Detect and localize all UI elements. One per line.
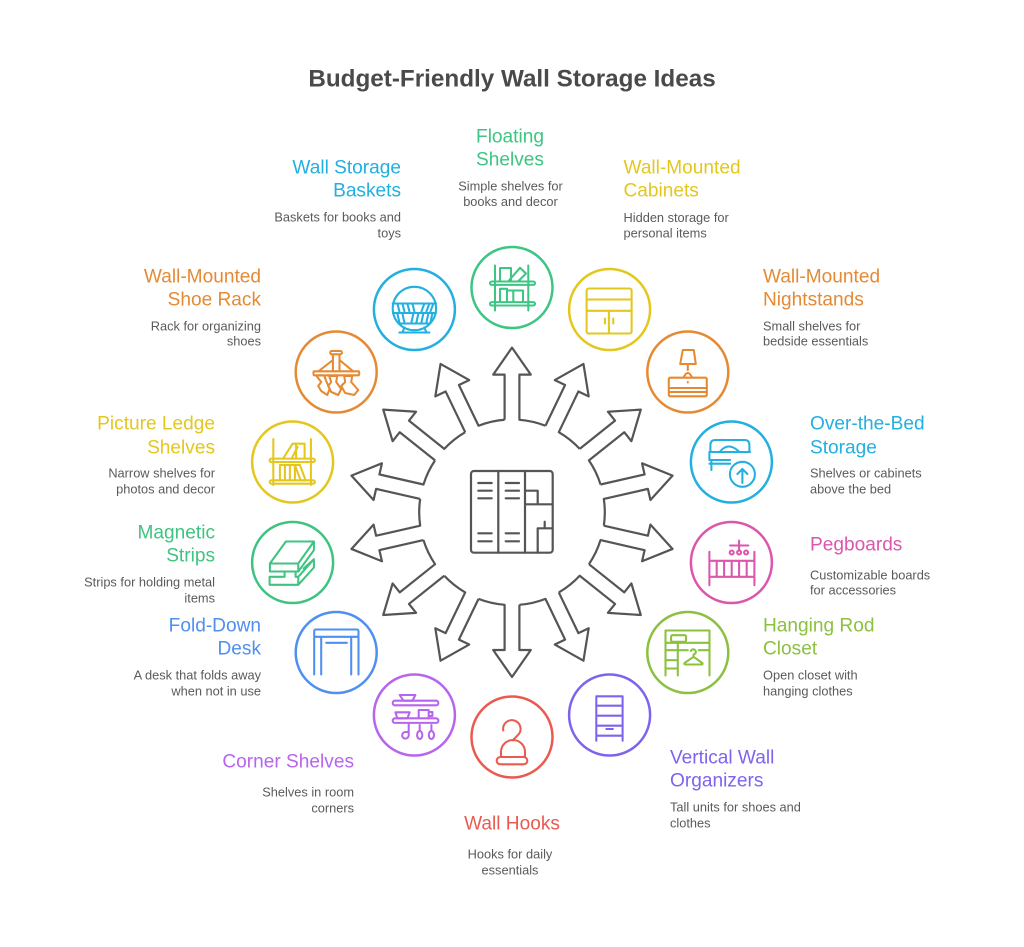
description: Narrow shelves for bbox=[108, 466, 216, 481]
label: Pegboards bbox=[810, 535, 902, 556]
icon: ledge shelves with books bbox=[252, 422, 333, 502]
description: items bbox=[184, 591, 215, 606]
description: Small shelves for bbox=[763, 319, 861, 334]
icon: floating shelves bbox=[472, 247, 552, 328]
arrow 5 bbox=[589, 513, 677, 582]
central arrows ring bbox=[344, 348, 680, 677]
arrow 8 bbox=[479, 599, 531, 677]
item: Over-the-Bed Storage bbox=[691, 414, 925, 502]
label: Wall-Mounted bbox=[624, 158, 741, 179]
item: Pegboards bbox=[691, 522, 930, 603]
description: Customizable boards bbox=[810, 568, 930, 583]
arrow 9 bbox=[410, 576, 491, 669]
label: Cabinets bbox=[624, 181, 699, 202]
label: Corner Shelves bbox=[222, 752, 354, 773]
arrow 14 bbox=[424, 349, 505, 442]
description: Shelves or cabinets bbox=[810, 466, 922, 481]
arrow 11 bbox=[344, 499, 432, 567]
label: Closet bbox=[763, 639, 818, 660]
label: Desk bbox=[217, 639, 261, 660]
label: Wall Hooks bbox=[464, 814, 560, 835]
description: photos and decor bbox=[116, 482, 216, 497]
label: Strips bbox=[166, 546, 215, 567]
description: personal items bbox=[624, 226, 707, 241]
item: Fold-Down Desk bbox=[134, 612, 377, 699]
label: Over-the-Bed bbox=[810, 414, 925, 435]
item: Picture Ledge Shelves bbox=[97, 414, 333, 502]
label: Floating bbox=[476, 127, 544, 148]
description: clothes bbox=[670, 816, 711, 831]
icon: hanging shoe rack bbox=[296, 332, 377, 412]
label: Wall Storage bbox=[292, 158, 401, 179]
icon: closet with hanger bbox=[647, 612, 728, 693]
label: Hanging Rod bbox=[763, 616, 874, 637]
description: essentials bbox=[482, 863, 538, 878]
description: above the bed bbox=[810, 482, 891, 497]
description: shoes bbox=[227, 334, 261, 349]
arrow 10 bbox=[362, 540, 456, 630]
description: hanging clothes bbox=[763, 684, 853, 699]
description: toys bbox=[378, 226, 401, 241]
item: Wall Hooks bbox=[464, 696, 560, 878]
item: Wall-Mounted Shoe Rack bbox=[144, 267, 377, 412]
item: Wall-Mounted Cabinets bbox=[569, 158, 741, 350]
description: corners bbox=[311, 801, 354, 816]
label: Picture Ledge bbox=[97, 414, 215, 435]
icon: bed with up arrow bbox=[691, 422, 772, 502]
description: Strips for holding metal bbox=[84, 575, 215, 590]
label: Storage bbox=[810, 438, 877, 459]
item: Magnetic Strips bbox=[84, 522, 333, 606]
item: Wall-Mounted Nightstands bbox=[647, 267, 880, 412]
title: Budget-Friendly Wall Storage Ideas bbox=[308, 66, 716, 92]
description: when not in use bbox=[170, 684, 261, 699]
description: bedside essentials bbox=[763, 334, 868, 349]
arrow 4 bbox=[592, 457, 680, 526]
icon: shelves with cups and utensils bbox=[374, 674, 455, 756]
label: Nightstands bbox=[763, 290, 864, 311]
description: Hidden storage for bbox=[624, 210, 730, 225]
item: Floating Shelves bbox=[458, 127, 564, 328]
arrow 13 bbox=[372, 383, 465, 473]
icon: central storage wall bbox=[471, 471, 553, 553]
icon: hook bbox=[472, 696, 552, 778]
icon: pegboard crib bbox=[691, 522, 772, 603]
description: Shelves in room bbox=[262, 785, 354, 800]
icon: metal beam bbox=[252, 522, 333, 603]
arrow 6 bbox=[559, 552, 652, 641]
description: Simple shelves for bbox=[458, 179, 564, 194]
label: Fold-Down bbox=[169, 616, 261, 637]
item: Hanging Rod Closet bbox=[647, 612, 874, 699]
arrow 3 bbox=[568, 395, 662, 484]
icon: tall organizer bbox=[569, 674, 650, 756]
item: Wall Storage Baskets bbox=[274, 158, 455, 350]
description: Open closet with bbox=[763, 668, 858, 683]
description: Hooks for daily bbox=[468, 847, 553, 862]
item: Corner Shelves bbox=[222, 674, 455, 816]
item: Vertical Wall Organizers bbox=[569, 674, 801, 831]
arrow 2 bbox=[533, 356, 614, 449]
label: Shoe Rack bbox=[168, 290, 261, 311]
label: Magnetic bbox=[138, 523, 215, 544]
label: Baskets bbox=[333, 181, 401, 202]
arrow 1 bbox=[493, 348, 545, 426]
description: Rack for organizing bbox=[151, 319, 261, 334]
label: Wall-Mounted bbox=[144, 267, 261, 288]
label: Shelves bbox=[147, 438, 215, 459]
icon: round basket shelf bbox=[374, 269, 455, 350]
label: Vertical Wall bbox=[670, 748, 774, 769]
description: A desk that folds away bbox=[134, 668, 262, 683]
label: Shelves bbox=[476, 150, 544, 171]
description: Baskets for books and bbox=[274, 210, 401, 225]
icon: desk bbox=[296, 612, 377, 693]
description: for accessories bbox=[810, 583, 896, 598]
icon: nightstand with lamp bbox=[647, 332, 728, 412]
description: Tall units for shoes and bbox=[670, 800, 801, 815]
description: books and decor bbox=[463, 194, 559, 209]
arrow 7 bbox=[519, 582, 600, 675]
label: Wall-Mounted bbox=[763, 267, 880, 288]
arrow 12 bbox=[347, 443, 435, 511]
label: Organizers bbox=[670, 771, 763, 792]
icon: cabinet bbox=[569, 269, 650, 350]
